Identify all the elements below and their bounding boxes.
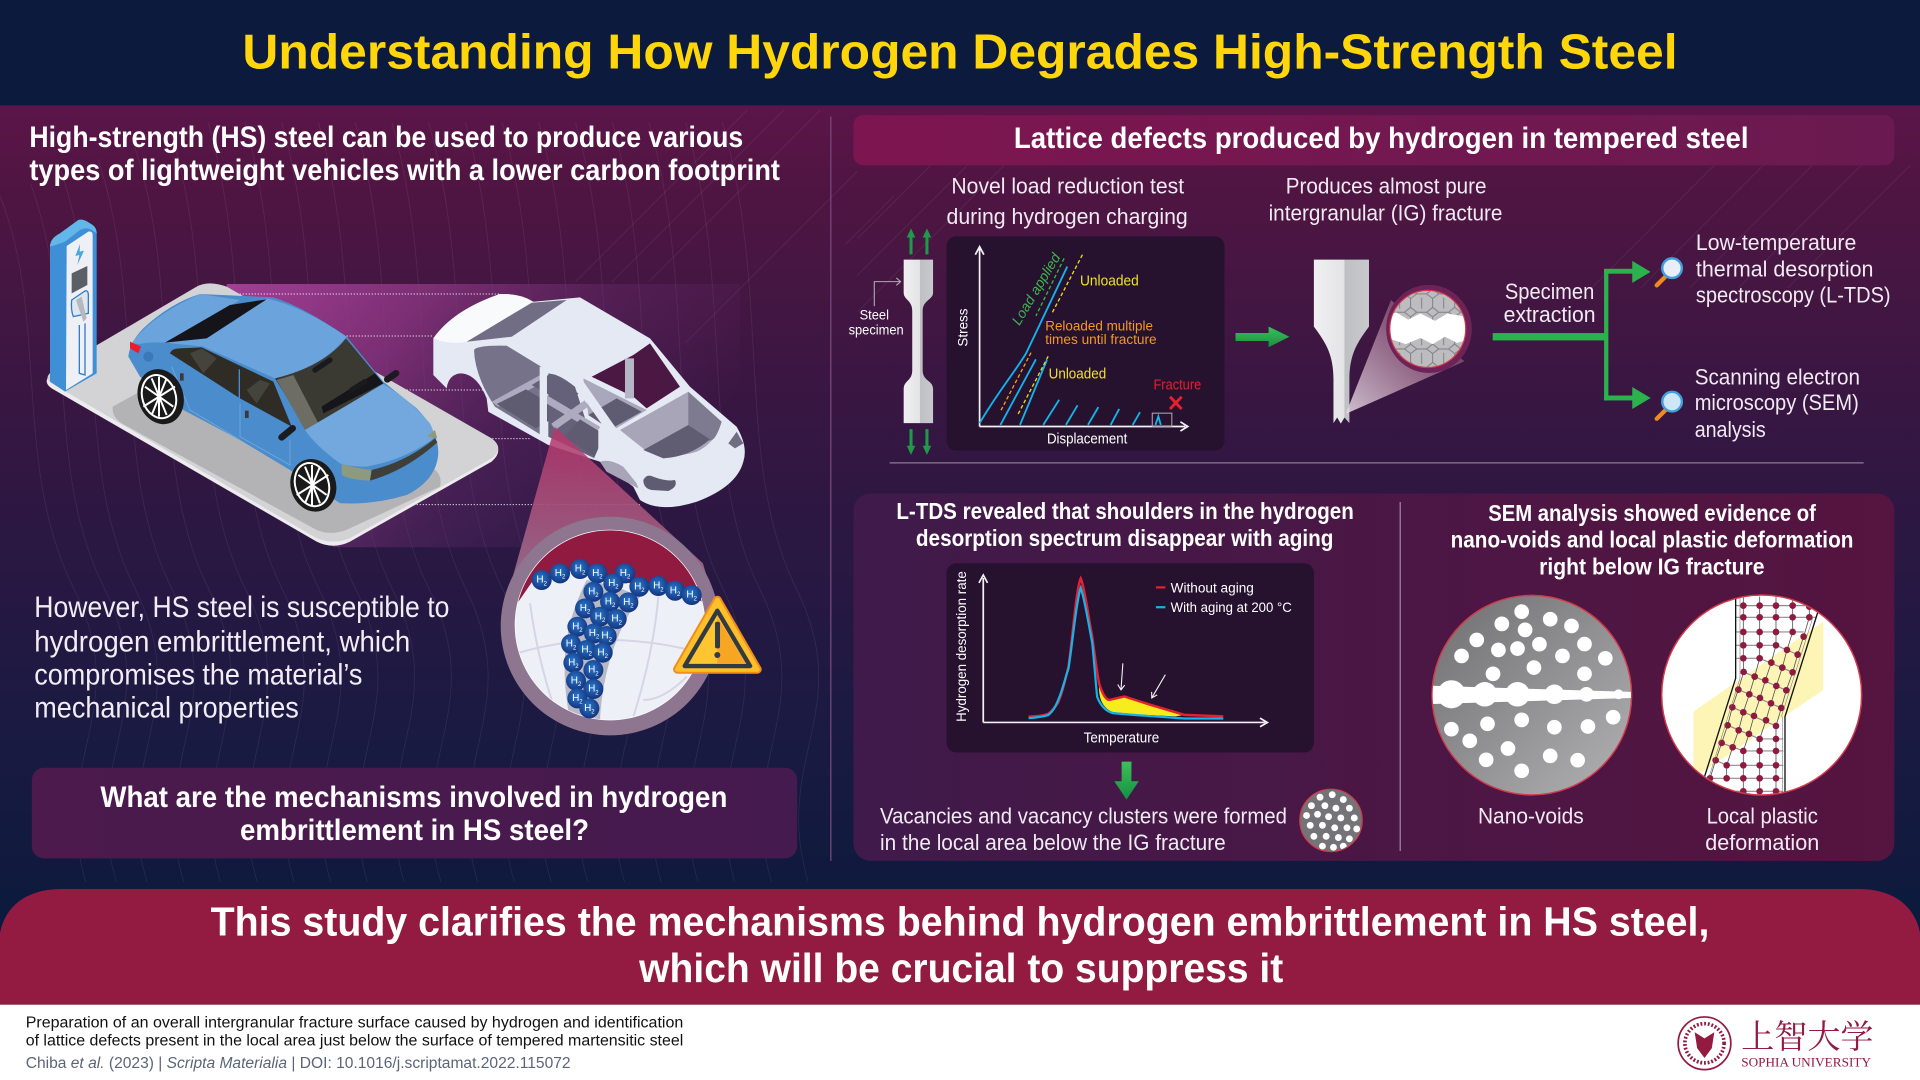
hood: [305, 384, 434, 467]
blue car: [128, 294, 438, 518]
hydrogen molecules: 2: [605, 654, 609, 660]
SEM heading: SEM analysis showed evidence of: [1488, 500, 1816, 526]
load reduction test heading: during hydrogen charging: [947, 204, 1188, 229]
hydrogen molecules: H: [588, 665, 595, 676]
text: hydrogen embrittlement: However, HS steel is susceptible to: [34, 591, 449, 624]
hydrogen molecules: 2: [579, 628, 583, 634]
arrow: test to fracture: [1236, 327, 1289, 347]
hydrogen molecules: H: [588, 684, 595, 695]
far side window: [583, 343, 680, 430]
text: hydrogen embrittlement: [34, 591, 449, 725]
conclusion banner: [0, 889, 1920, 1005]
citation text: Preparation of an overall intergranular fracture surface caused by hydrogen and identification: [26, 1014, 683, 1031]
hydrogen molecules: H: [686, 590, 694, 601]
red curve: [1029, 578, 1223, 717]
stress-displacement chart: [947, 236, 1224, 451]
citation text: [26, 1014, 683, 1072]
specimen: [1314, 260, 1369, 424]
L-TDS heading: [896, 498, 1354, 551]
axes: [979, 575, 1267, 727]
SEM heading: nano-voids and local plastic deformation: [1451, 526, 1853, 552]
hydrogen molecules: 2: [627, 575, 631, 581]
vacancies text: in the local area below the IG fracture: [880, 830, 1226, 855]
parking platform: [47, 283, 498, 546]
hydrogen molecules: H: [670, 585, 677, 596]
stress-displacement chart: Reloaded multiple: [1045, 318, 1153, 334]
hydrogen molecules: H: [592, 568, 599, 579]
hydrogen molecules: 2: [562, 575, 566, 581]
SEM label: microscopy (SEM): [1695, 390, 1859, 415]
hydrogen molecules: H: [571, 675, 578, 686]
hydrogen molecules: H: [634, 581, 641, 592]
hydrogen molecules: 2: [578, 682, 582, 688]
fracture heading: [1269, 173, 1502, 225]
blue curve: [1029, 588, 1223, 719]
nano-voids diagram: [1430, 595, 1632, 795]
citation text: of lattice defects present in the local area just below the surface of tempered martensitic steel: [26, 1033, 683, 1050]
hydrogen molecules: H: [536, 575, 544, 586]
legend: With aging at 200 °C: [1171, 599, 1292, 615]
steel specimen: Steel: [860, 307, 889, 323]
hydrogen molecules: H: [608, 578, 615, 589]
hydrogen molecules: 2: [587, 610, 591, 616]
fractured specimen with zoom callout: [1314, 260, 1472, 424]
vacancies text: [880, 803, 1287, 855]
specimen extraction label: Specimen: [1505, 279, 1594, 304]
text: hydrogen embrittlement: mechanical properties: [34, 692, 299, 725]
local plastic deformation diagram: [1662, 595, 1862, 797]
specimen extraction label: extraction: [1504, 302, 1596, 327]
L-TDS label: Low-temperature: [1696, 230, 1856, 255]
desorption chart: Hydrogen desorption rate: [954, 571, 969, 722]
citation text: Chiba et al. (2023) | Scripta Materialia | DOI: 10.1016/j.scriptamat.2022.115072: [26, 1055, 571, 1072]
desorption chart: Temperature: [1084, 731, 1159, 747]
small voids circle: [1300, 789, 1362, 852]
stress-displacement chart: Fracture: [1153, 377, 1201, 393]
SEM label: Scanning electron: [1695, 364, 1860, 389]
stress-displacement chart: Unloaded: [1080, 273, 1139, 289]
Sophia University logo: SOPHIA UNIVERSITY: [1741, 1056, 1871, 1070]
hydrogen molecules: 2: [544, 581, 548, 587]
icon: magnifier SEM: [1657, 392, 1682, 419]
hydrogen molecules: H: [568, 657, 575, 668]
conclusion banner: This study clarifies the mechanisms behind hydrogen embrittlement in HS steel,: [211, 899, 1709, 945]
stress-displacement chart: Load applied: [1008, 249, 1064, 328]
local plastic deformation label: deformation: [1705, 830, 1819, 855]
windshield: [275, 338, 383, 430]
SEM heading: right below IG fracture: [1539, 553, 1764, 579]
magnified grain boundary callout: [501, 427, 757, 735]
hydrogen molecules: H: [601, 631, 609, 642]
L-TDS heading: desorption spectrum disappear with aging: [916, 525, 1333, 551]
local plastic deformation label: Local plastic: [1707, 803, 1818, 828]
question panel: [32, 768, 797, 858]
axes: [975, 247, 1188, 431]
hydrogen molecules: 2: [660, 587, 664, 593]
left heading: [29, 121, 780, 187]
callout cone: [1346, 300, 1464, 414]
hydrogen molecules: H: [611, 614, 619, 625]
left heading: types of lightweight vehicles with a lower carbon footprint: [29, 154, 780, 187]
legend: [1156, 580, 1292, 615]
hydrogen molecules: [532, 559, 702, 718]
L-TDS label: thermal desorption: [1696, 257, 1873, 282]
nano-voids label: Nano-voids: [1478, 803, 1584, 828]
local plastic deformation label: [1705, 803, 1819, 855]
right panel heading: Lattice defects produced by hydrogen in tempered steel: [1014, 122, 1749, 155]
hydrogen molecules: H: [555, 568, 562, 579]
atomic lattice: [1707, 597, 1817, 797]
hydrogen molecules: 2: [573, 645, 577, 651]
title bar: [0, 0, 1920, 105]
conclusion banner: which will be crucial to suppress it: [638, 945, 1283, 991]
hydrogen molecules: 2: [612, 603, 616, 609]
steel specimen: specimen: [849, 321, 904, 337]
hydrogen molecules: H: [566, 639, 573, 650]
hydrogen molecules: H: [572, 621, 579, 632]
shoulder fill: [1099, 683, 1184, 716]
hydrogen molecules: H: [580, 603, 587, 614]
hydrogen molecules: 2: [582, 570, 586, 576]
hydrogen molecules: 2: [595, 593, 599, 599]
hydrogen molecules: 2: [575, 664, 579, 670]
background: [0, 105, 1920, 889]
load reduction test heading: Novel load reduction test: [951, 173, 1184, 198]
wheels: [130, 363, 343, 518]
fracture heading: intergranular (IG) fracture: [1269, 200, 1502, 225]
hydrogen molecules: 2: [619, 620, 623, 626]
side opening front: [532, 373, 598, 460]
hydrogen molecules: H: [605, 596, 612, 607]
load curves: [980, 267, 1161, 425]
purple highlight beam: [227, 284, 740, 547]
hydrogen molecules: H: [620, 568, 627, 579]
hydrogen molecules: 2: [596, 635, 600, 641]
hydrogen molecules: H: [575, 564, 582, 575]
hydrogen molecules: 2: [677, 592, 681, 598]
fracture heading: Produces almost pure: [1286, 173, 1487, 198]
hydrogen molecules: 2: [595, 671, 599, 677]
hydrogen molecules: 2: [615, 585, 619, 591]
question panel: What are the mechanisms involved in hydrogen: [100, 781, 727, 814]
hydrogen molecules: H: [595, 611, 602, 622]
L-TDS label: spectroscopy (L-TDS): [1696, 282, 1891, 307]
hydrogen molecules: 2: [591, 710, 595, 716]
stress-displacement chart: Displacement: [1047, 431, 1127, 447]
icon: warning triangle: [677, 600, 757, 669]
text: hydrogen embrittlement: hydrogen embrittlement, which: [34, 625, 410, 658]
desorption chart: [947, 563, 1314, 752]
specimen extraction label: [1504, 279, 1596, 327]
illustration: car, charger and platform: [47, 220, 740, 547]
vacancies text: Vacancies and vacancy clusters were formed: [880, 803, 1287, 828]
SEM heading: [1451, 500, 1853, 579]
hydrogen molecules: 2: [599, 575, 603, 581]
L-TDS heading: L-TDS revealed that shoulders in the hydrogen: [896, 498, 1354, 524]
dashed guides: [1000, 255, 1082, 415]
title: Understanding How Hydrogen Degrades High-Strength Steel: [242, 26, 1678, 80]
white car body frame: [433, 294, 745, 507]
icon: charging station: [50, 220, 97, 392]
side opening rear: [474, 346, 564, 437]
question panel: embrittlement in HS steel?: [240, 814, 589, 847]
engine bay: [620, 392, 722, 458]
L-TDS label: [1696, 230, 1891, 307]
hydrogen molecules: 2: [589, 651, 593, 657]
icon: magnifier L-TDS: [1657, 258, 1682, 285]
stress-displacement chart: Unloaded: [1049, 366, 1106, 382]
hydrogen molecules: H: [584, 703, 591, 714]
text: hydrogen embrittlement: compromises the material’s: [34, 658, 362, 691]
branching arrow: [1493, 261, 1651, 409]
hydrogen molecules: H: [653, 581, 660, 592]
stress-displacement chart: times until fracture: [1045, 331, 1157, 347]
hydrogen molecules: 2: [694, 596, 698, 602]
Sophia University logo: 上智大学: [1741, 1019, 1873, 1056]
hydrogen molecules: H: [597, 647, 605, 658]
SEM label: [1695, 364, 1860, 442]
stress-displacement chart: Stress: [955, 308, 970, 347]
steel specimen: [849, 228, 933, 455]
hydrogen molecules: H: [572, 693, 579, 704]
hydrogen molecules: 2: [609, 637, 613, 643]
hydrogen molecules: 2: [579, 700, 583, 706]
left heading: High-strength (HS) steel can be used to produce various: [29, 121, 743, 154]
hydrogen molecules: H: [623, 597, 630, 608]
SEM label: analysis: [1695, 417, 1766, 442]
grain structure: [1384, 290, 1469, 367]
side windows: [170, 347, 292, 427]
magnified view: [501, 517, 757, 735]
lower results panel: [853, 493, 1894, 861]
right panel heading: [853, 115, 1894, 165]
Sophia University logo: [1678, 1017, 1873, 1070]
load reduction test heading: [947, 173, 1188, 229]
arrow: down: [1114, 762, 1139, 800]
footer: [0, 1005, 1920, 1080]
hydrogen molecules: H: [588, 586, 595, 597]
hydrogen molecules: 2: [641, 588, 645, 594]
hydrogen molecules: 2: [595, 690, 599, 696]
hydrogen molecules: 2: [602, 618, 606, 624]
legend: Without aging: [1171, 580, 1254, 596]
shoulder arrows: [1118, 663, 1165, 698]
hydrogen molecules: 2: [630, 604, 634, 610]
hydrogen molecules: H: [581, 645, 589, 656]
callout cone: [504, 427, 718, 612]
hydrogen molecules: H: [589, 628, 596, 639]
